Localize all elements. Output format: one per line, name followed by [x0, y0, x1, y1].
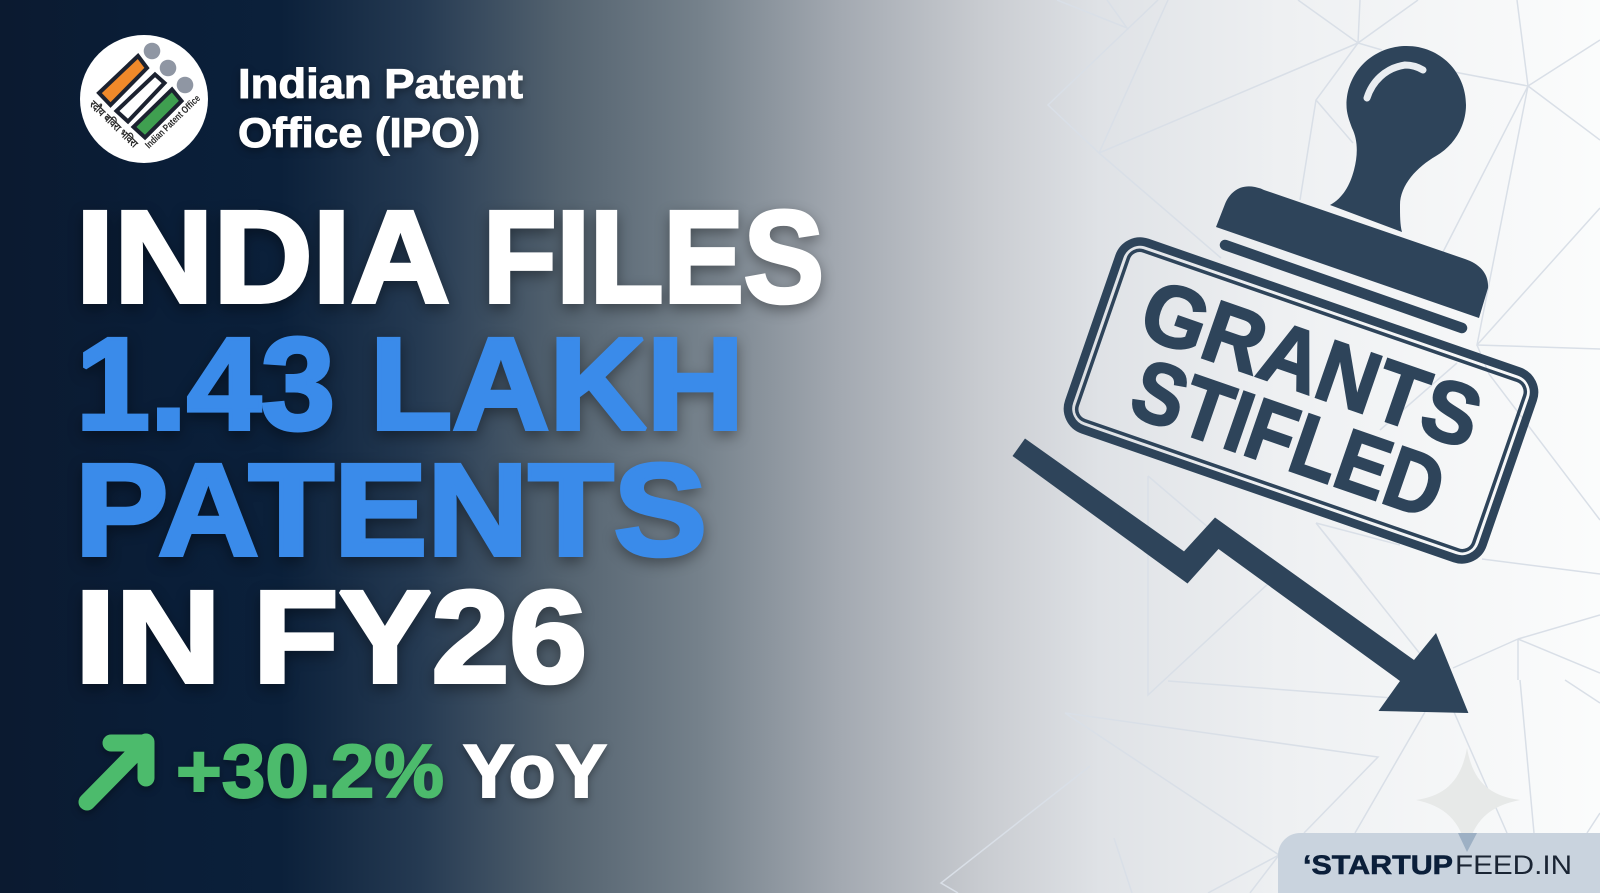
headline line 1 — [76, 183, 824, 330]
logo: Indian Patent Office emblem — [80, 35, 208, 163]
watermark badge — [1278, 833, 1600, 893]
logo: English caption: Indian Patent Office — [143, 93, 203, 151]
stamp block — [1216, 186, 1488, 318]
stamp bar — [1225, 245, 1462, 328]
growth figure: +30.2% — [176, 729, 444, 813]
organisation name: Office (IPO) — [238, 109, 480, 156]
logo: Hindi caption: रदौय बविरा भविरा — [86, 97, 141, 151]
badge text — [1303, 850, 1572, 880]
headline line 4 — [75, 563, 587, 710]
imprint outer border — [1062, 236, 1540, 565]
headline line 1: FILES — [483, 183, 824, 330]
logo: orange stripe — [99, 56, 147, 105]
headline line 4: IN — [75, 563, 221, 710]
decorative sparkle — [1416, 748, 1520, 852]
headline line 2: 1.43 — [76, 310, 335, 457]
headline line 3: PATENTS — [75, 436, 707, 583]
arrow: falling trend — [1012, 438, 1468, 713]
imprint text line 2: STIFLED — [1120, 340, 1457, 538]
imprint inner border — [1073, 247, 1529, 554]
headline — [75, 183, 824, 710]
logo: grey dots — [144, 43, 193, 93]
icon: rubber stamp — [1062, 46, 1540, 565]
icon: green up arrow — [87, 742, 146, 802]
headline line 1: INDIA — [76, 183, 450, 330]
stamp handle highlight — [1367, 65, 1423, 98]
badge text: FEED.IN — [1455, 850, 1572, 880]
logo: white stripe — [116, 74, 164, 122]
stamp imprint — [1062, 236, 1540, 565]
headline line 4: FY26 — [253, 563, 587, 710]
stamp handle — [1330, 46, 1466, 232]
organisation name — [238, 60, 523, 156]
headline line 2 — [76, 310, 744, 457]
logo: green stripe — [134, 90, 182, 138]
YoY label: YoY — [463, 729, 607, 813]
organisation name: Indian Patent — [238, 60, 523, 107]
imprint text line 1: GRANTS — [1129, 261, 1494, 468]
headline line 2: LAKH — [370, 310, 744, 457]
badge text: ‘STARTUP — [1303, 850, 1453, 880]
